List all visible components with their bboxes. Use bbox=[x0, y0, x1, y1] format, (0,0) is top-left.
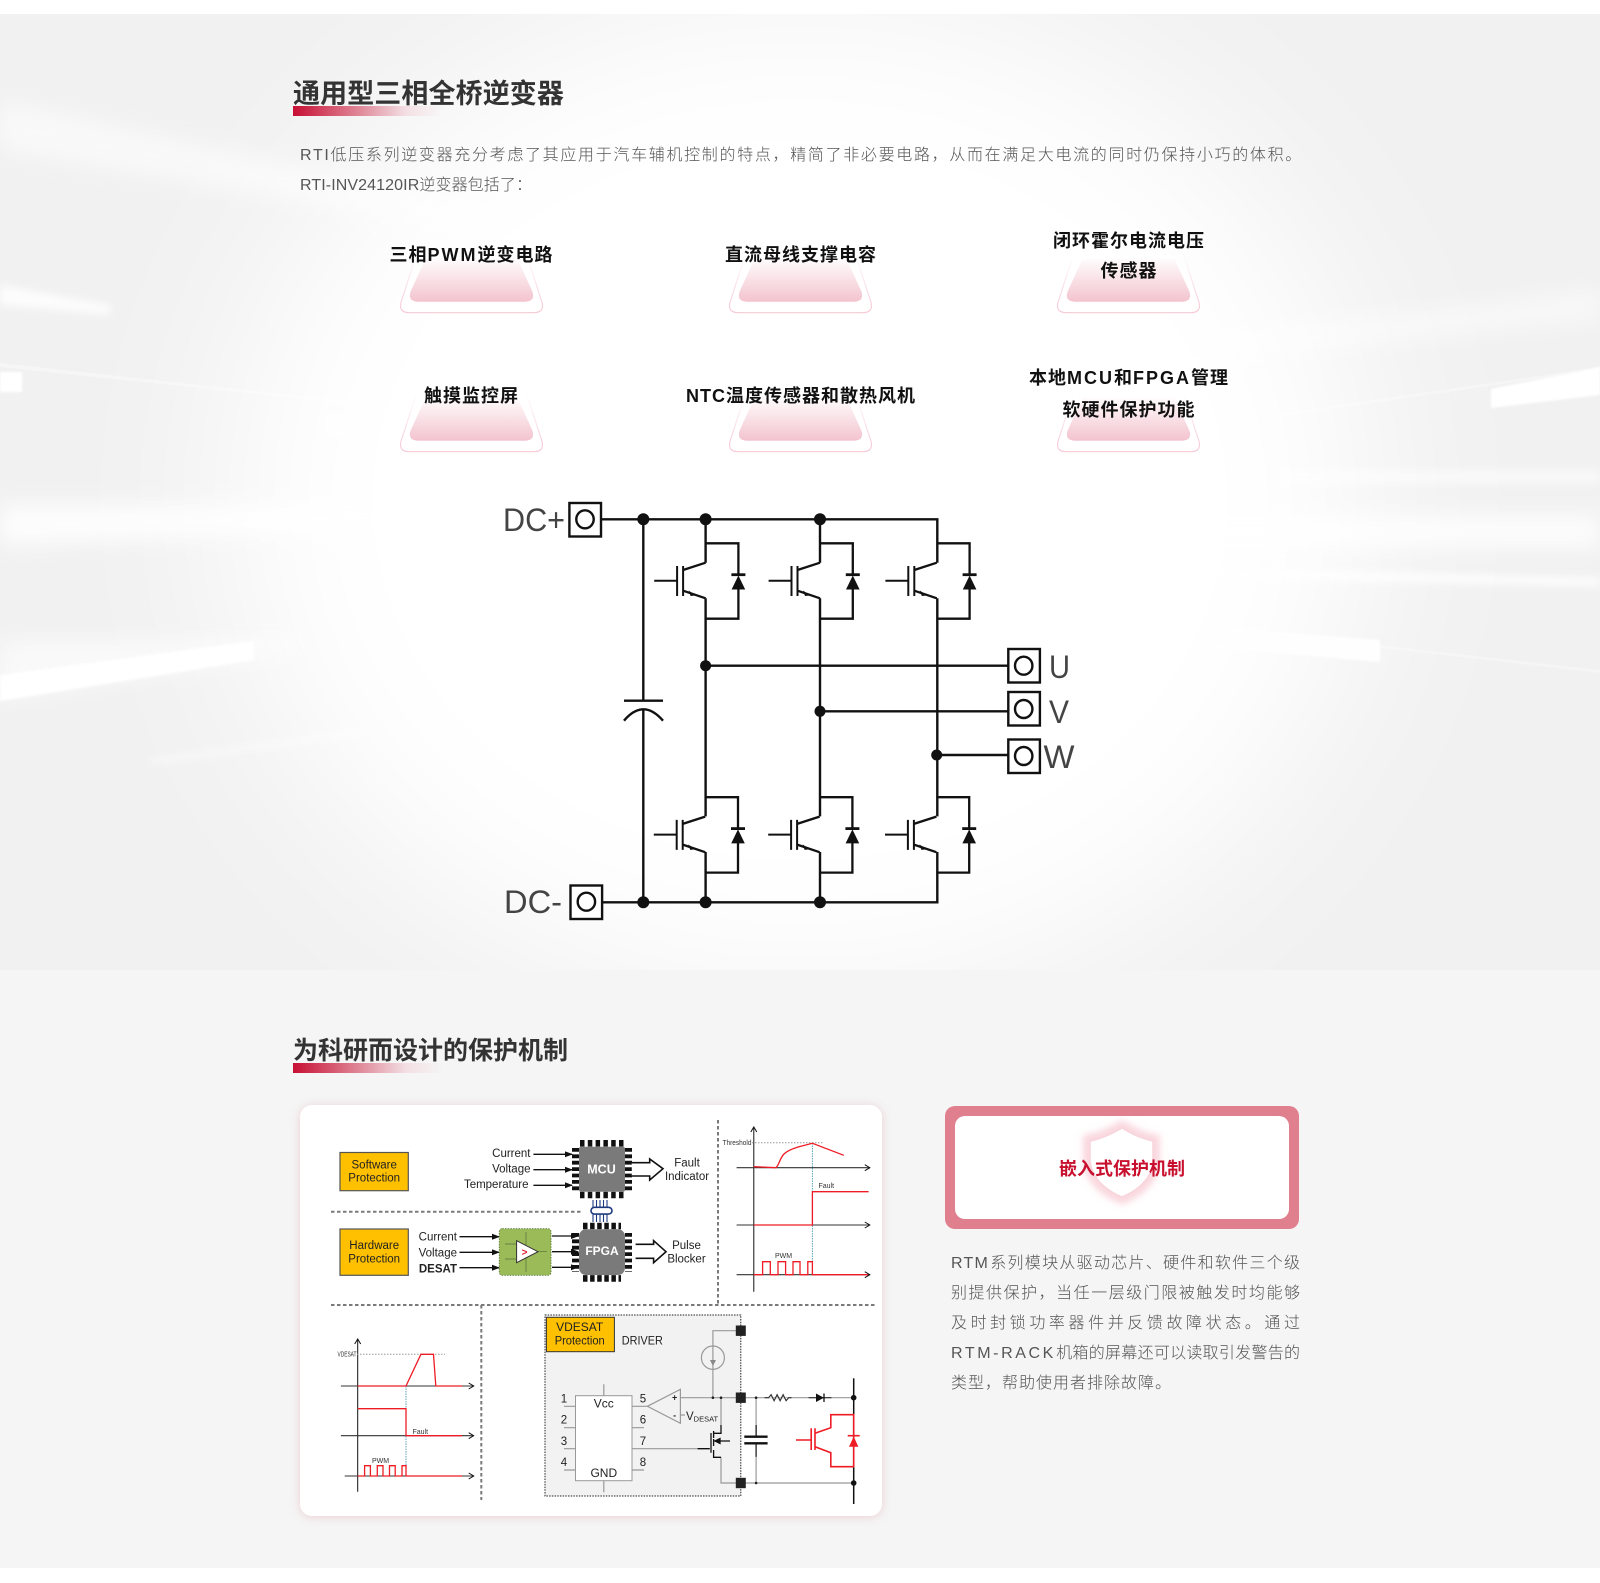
op-amp labels: - bbox=[673, 1410, 676, 1420]
arrow: fault indicator bbox=[632, 1159, 663, 1180]
chart: three-phase inverter circuit bbox=[503, 502, 1075, 920]
background: light streak panel bbox=[0, 14, 1600, 970]
pin numbers bbox=[561, 1394, 646, 1469]
pedestal 1 bbox=[400, 255, 542, 313]
pedestal 6 bbox=[1058, 394, 1200, 452]
lower IGBT switches bbox=[654, 797, 976, 873]
chip: driver IC bbox=[576, 1396, 632, 1481]
label: 闭环霍尔电流电压传感器: 传感器 bbox=[1100, 260, 1158, 280]
heading underline bbox=[293, 106, 443, 116]
label: fault indicator: Fault bbox=[674, 1158, 701, 1170]
pedestal 5 bbox=[730, 394, 872, 452]
chart: threshold timing: PWM bbox=[775, 1253, 792, 1260]
box: VDESAT protection bbox=[546, 1317, 614, 1352]
op-amp labels bbox=[672, 1392, 719, 1424]
op-amp labels: + bbox=[672, 1392, 677, 1402]
chart: VDESAT timing bbox=[338, 1339, 474, 1492]
driver block bbox=[545, 1315, 854, 1496]
pin numbers: 6 bbox=[640, 1414, 646, 1426]
label: fault indicator bbox=[665, 1158, 709, 1183]
label: fault indicator: Indicator bbox=[665, 1171, 709, 1183]
pin numbers: 5 bbox=[640, 1394, 646, 1406]
MCU inputs bbox=[464, 1148, 572, 1191]
text block: intro line 1: RTI低压系列逆变器充分考虑了其应用于汽车辅机控制的特点，精简了非必要电路，从而在满足大电流的同时仍保持小巧的体积。 bbox=[300, 147, 1303, 164]
label: 本地MCU和FPGA管理软硬件保护功能 bbox=[1029, 368, 1229, 420]
chip: FPGA bbox=[576, 1226, 628, 1278]
chart: threshold timing bbox=[722, 1127, 870, 1292]
label: 本地MCU和FPGA管理软硬件保护功能: 软硬件保护功能 bbox=[1062, 400, 1196, 420]
chip: driver IC: Vcc bbox=[594, 1396, 614, 1410]
arrow: pulse blocker bbox=[636, 1241, 666, 1263]
pin numbers: 1 bbox=[561, 1394, 567, 1406]
pin numbers: 4 bbox=[561, 1457, 568, 1469]
chart: VDESAT timing: PWM bbox=[372, 1458, 389, 1465]
terminal labels: W bbox=[1044, 739, 1075, 775]
chip: FPGA: FPGA bbox=[585, 1244, 619, 1258]
label: pulse blocker bbox=[667, 1240, 706, 1265]
FPGA inputs bbox=[419, 1232, 499, 1276]
callout: 嵌入式保护机制 bbox=[945, 1106, 1299, 1229]
text block: protection description: RTM-RACK机箱的屏幕还可以读取引发警告的 bbox=[951, 1345, 1300, 1362]
op-amp labels: DESAT bbox=[694, 1414, 719, 1424]
callout title: 嵌入式保护机制 bbox=[1059, 1158, 1185, 1178]
block: comparator: > bbox=[522, 1248, 528, 1258]
chip: MCU: MCU bbox=[587, 1162, 616, 1176]
pin numbers: 3 bbox=[561, 1436, 567, 1448]
MOSFET bbox=[698, 1425, 730, 1458]
FPGA inputs: Current bbox=[419, 1232, 458, 1244]
chart: threshold timing: Threshold bbox=[722, 1140, 752, 1147]
text block: protection description bbox=[951, 1254, 1300, 1392]
pedestal 2 bbox=[730, 255, 872, 313]
label: 触摸监控屏: 触摸监控屏 bbox=[424, 386, 519, 406]
box: VDESAT protection: VDESAT bbox=[556, 1320, 604, 1334]
label: 闭环霍尔电流电压传感器 bbox=[1053, 230, 1205, 280]
label: 直流母线支撑电容: 直流母线支撑电容 bbox=[725, 244, 877, 264]
callout inner panel bbox=[955, 1116, 1289, 1219]
terminal labels bbox=[503, 502, 1075, 920]
FPGA inputs: Voltage bbox=[419, 1247, 457, 1259]
text block: intro line 2: RTI-INV24120IR逆变器包括了： bbox=[300, 177, 532, 194]
label: 闭环霍尔电流电压传感器: 闭环霍尔电流电压 bbox=[1053, 230, 1205, 250]
diagram: protection architecture bbox=[331, 1120, 874, 1504]
feature pedestals bbox=[400, 263, 1200, 452]
label: pulse blocker: Pulse bbox=[672, 1240, 701, 1252]
text block: protection description: 别提供保护，当任一层级门限被触发时均能够 bbox=[951, 1285, 1300, 1302]
box: hardware protection bbox=[340, 1229, 408, 1275]
MCU inputs: Temperature bbox=[464, 1179, 528, 1191]
terminal labels: DC+ bbox=[503, 502, 565, 538]
text block: protection description: RTM系列模块从驱动芯片、硬件和软件三个级 bbox=[951, 1255, 1300, 1272]
pin numbers: 7 bbox=[640, 1436, 646, 1448]
box: software protection bbox=[340, 1152, 408, 1191]
text block: protection description: 类型，帮助使用者排除故障。 bbox=[951, 1375, 1172, 1392]
label: NTC温度传感器和散热风机: NTC温度传感器和散热风机 bbox=[686, 386, 916, 406]
upper IGBT switches bbox=[654, 543, 977, 619]
box: software protection: Software bbox=[352, 1160, 397, 1172]
dashed dividers bbox=[331, 1120, 876, 1500]
op-amp labels: V bbox=[686, 1411, 694, 1423]
chip: MCU bbox=[576, 1143, 628, 1195]
heading: 通用型三相全桥逆变器: 通用型三相全桥逆变器 bbox=[293, 79, 564, 109]
chip: driver IC: GND bbox=[590, 1466, 617, 1480]
label: 三相PWM逆变电路: 三相PWM逆变电路 bbox=[390, 244, 554, 264]
junction dots bbox=[637, 513, 942, 908]
pedestal 3 bbox=[1058, 255, 1200, 313]
red IGBT bbox=[796, 1415, 860, 1467]
terminal labels: U bbox=[1049, 649, 1070, 685]
text block: protection description: 及时封锁功率器件并反馈故障状态。通过 bbox=[951, 1315, 1300, 1332]
label: DRIVER: DRIVER bbox=[622, 1333, 663, 1347]
block: comparator bbox=[499, 1229, 551, 1275]
icon: shield bbox=[1080, 1118, 1162, 1206]
box: VDESAT protection: Protection bbox=[555, 1333, 605, 1347]
MCU inputs: Voltage bbox=[492, 1164, 530, 1176]
external filter and capacitor bbox=[744, 1378, 856, 1504]
label: 本地MCU和FPGA管理软硬件保护功能: 本地MCU和FPGA管理 bbox=[1029, 368, 1229, 388]
box: hardware protection: Hardware bbox=[349, 1240, 399, 1252]
wires bbox=[601, 519, 1008, 902]
terminals bbox=[569, 503, 1040, 919]
chart: VDESAT timing: VDESAT bbox=[338, 1352, 357, 1358]
background: lower section bbox=[0, 970, 1600, 1568]
heading underline bbox=[293, 1063, 443, 1073]
comparator outputs bbox=[552, 1236, 578, 1267]
pedestal 4 bbox=[400, 394, 542, 452]
bus between MCU and FPGA bbox=[591, 1200, 612, 1222]
box: software protection: Protection bbox=[348, 1173, 400, 1185]
connection squares bbox=[736, 1326, 746, 1488]
box: hardware protection: Protection bbox=[348, 1253, 400, 1265]
label: pulse blocker: Blocker bbox=[667, 1253, 706, 1265]
terminal labels: DC- bbox=[504, 884, 562, 920]
FPGA inputs: DESAT bbox=[419, 1264, 457, 1276]
chart: threshold timing: Fault bbox=[818, 1183, 834, 1190]
pin numbers: 2 bbox=[561, 1414, 567, 1426]
terminal labels: V bbox=[1049, 694, 1070, 730]
heading: 为科研而设计的保护机制: 为科研而设计的保护机制 bbox=[293, 1037, 568, 1065]
pin numbers: 8 bbox=[640, 1457, 646, 1469]
MCU inputs: Current bbox=[492, 1148, 531, 1160]
panel: protection diagrams bbox=[300, 1105, 882, 1516]
gray driver wiring bbox=[564, 1331, 854, 1492]
chart: VDESAT timing: Fault bbox=[412, 1429, 428, 1436]
